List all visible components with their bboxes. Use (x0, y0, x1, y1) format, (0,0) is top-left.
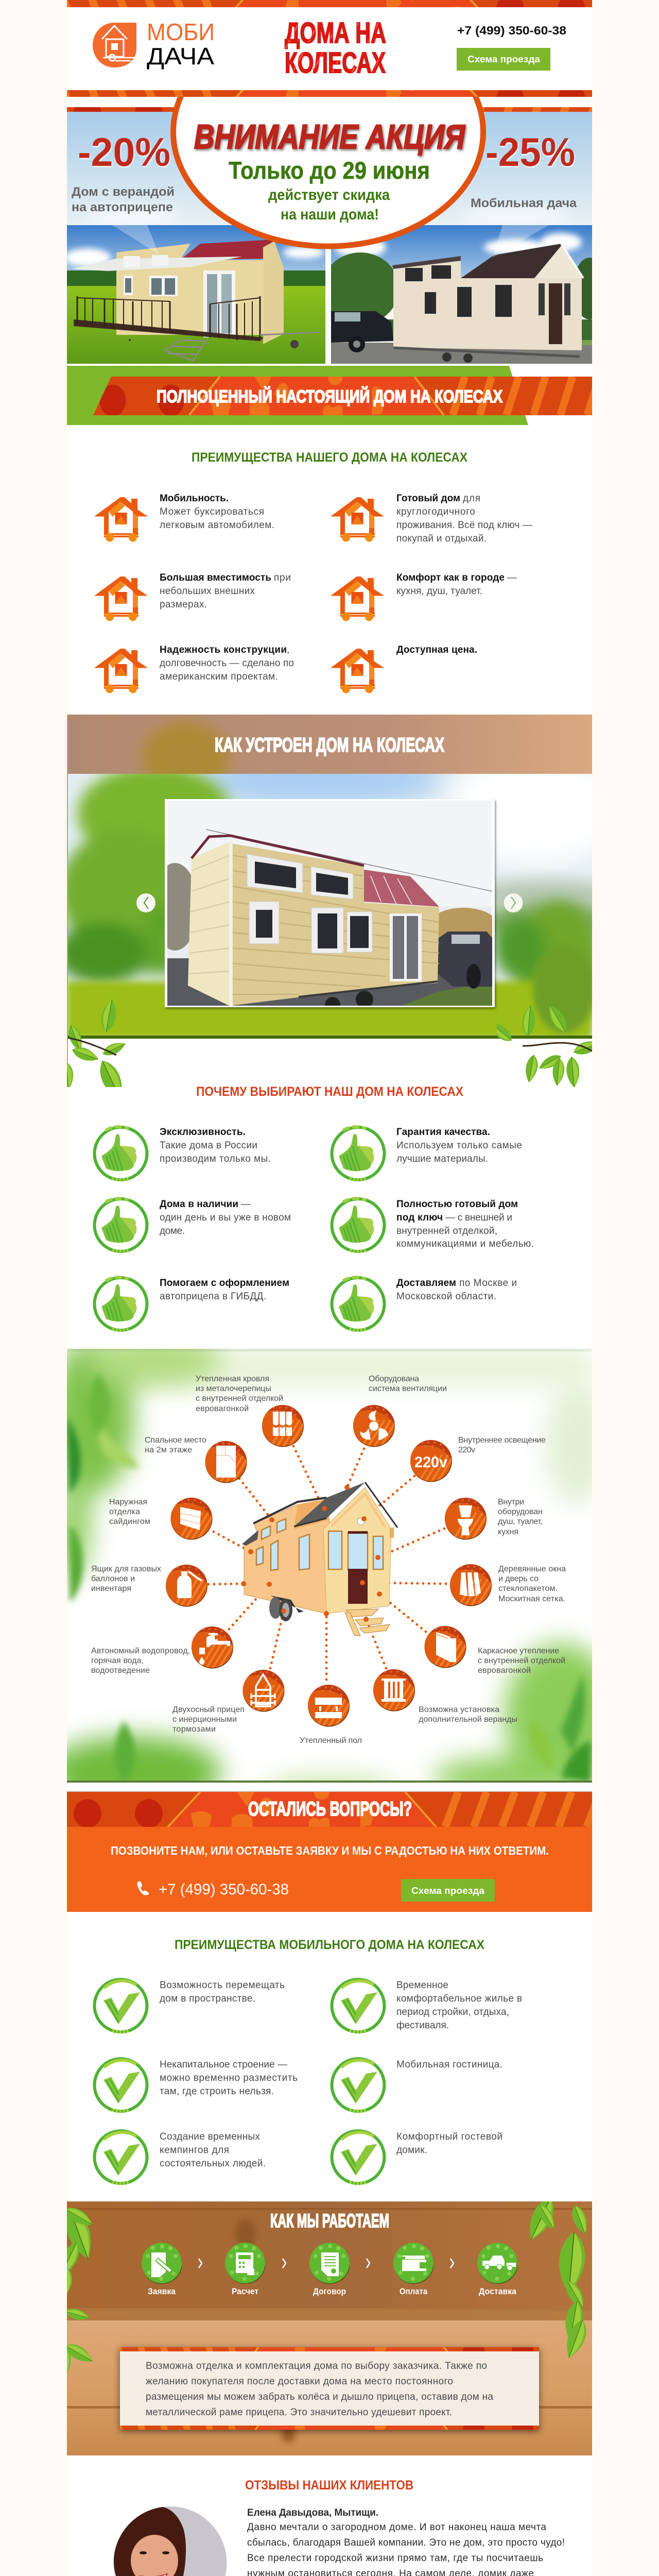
item: guest house (332, 2131, 502, 2183)
heading: ПОЧЕМУ ВЫБИРАЮТ НАШ ДОМ НА КОЛЕСАХ (196, 1084, 463, 1099)
item: ready house: круглогодичного (396, 506, 475, 517)
tiny house illustration (242, 1482, 397, 1636)
note box: Возможна отделка и комплектация дома по выбору заказчика. Также по (146, 2361, 487, 2371)
item: guarantee: Гарантия качества. (396, 1127, 490, 1138)
patterned strip (67, 107, 592, 112)
feature: plumbing: горячая вода, (91, 1656, 144, 1665)
photo: mobile dacha (322, 225, 606, 364)
feature: plumbing: Автономный водопровод, (91, 1647, 190, 1655)
feature: bathroom (442, 1497, 543, 1546)
wood planks (67, 2201, 592, 2320)
feature: insulation: Каркасное утепление (478, 1647, 559, 1655)
arrow (283, 2259, 286, 2268)
item: relocate: дом в пространстве. (160, 1993, 255, 2004)
item: relocate (95, 1979, 285, 2032)
panel: mobile home advantages (95, 1938, 522, 2183)
feature: siding: Наружная (109, 1498, 147, 1506)
item: ready house: для (463, 493, 480, 504)
route button (401, 1879, 495, 1902)
logo: МОБИ (147, 19, 215, 45)
item: camping: Создание временных (160, 2131, 261, 2142)
feature: insulation: евровагонкой (478, 1666, 531, 1675)
arrow (199, 2259, 202, 2268)
feature: windows (447, 1564, 566, 1613)
item: exclusivity: производим только мы. (160, 1154, 271, 1164)
heading: ОТЗЫВЫ НАШИХ КЛИЕНТОВ (245, 2478, 413, 2493)
feature: gas box: Ящик для газовых (91, 1565, 161, 1573)
item: camping (95, 2131, 266, 2183)
title ribbon (67, 366, 599, 425)
hero promo (67, 45, 592, 364)
feature: ventilation: система вентиляции (369, 1384, 447, 1393)
panel: questions call to action (67, 1791, 600, 1912)
note box (114, 2332, 539, 2446)
item: in stock: доме. (160, 1226, 185, 1236)
feature: plumbing (91, 1626, 241, 1675)
item: comfort (331, 572, 517, 621)
feature: bed: Спальное место (145, 1436, 206, 1445)
item: guarantee: Используем только самые (396, 1140, 522, 1151)
item: relocate: Возможность перемещать (160, 1980, 285, 1991)
item: non-capital (95, 2059, 298, 2111)
feature: trailer (172, 1669, 292, 1734)
item: price: Доступная цена. (396, 645, 477, 655)
feature: floor: Утепленный пол (300, 1736, 362, 1745)
item: in stock: Дома в наличии (160, 1199, 238, 1210)
item: guarantee: лучшие материалы. (396, 1154, 488, 1164)
blurred garden background (68, 774, 592, 1039)
panel: advantages of our house (94, 450, 532, 693)
item: comfort: — (507, 572, 517, 583)
step: payment (393, 2243, 433, 2296)
item: reliability (94, 645, 294, 693)
step: contract (309, 2243, 350, 2296)
feature: radiator: Возможна установка (419, 1705, 499, 1714)
item: hotel: Мобильная гостиница. (396, 2059, 502, 2070)
panel: how the house is built (67, 715, 592, 1087)
item: turnkey: — с внешней и (445, 1212, 512, 1223)
note box: желанию покупателя после доставки дома на место постоянного (146, 2376, 453, 2387)
left product name (72, 185, 175, 214)
feature: windows: Москитная сетка. (498, 1595, 565, 1603)
icon: phone (137, 1882, 149, 1895)
item: in stock: один день и вы уже в новом (160, 1212, 291, 1223)
step: calculation (225, 2243, 266, 2296)
panel: house features infographic (67, 1349, 592, 1783)
feature: trailer: с инерционными (172, 1715, 237, 1724)
item: mobility: Может буксироваться (160, 506, 264, 517)
steps (345, 1609, 390, 1636)
item: exclusivity: Такие дома в России (160, 1140, 257, 1151)
item: paperwork (95, 1277, 289, 1330)
phone: +7 (499) 350-60-38 (457, 24, 566, 37)
feature: radiator: дополнительной веранды (419, 1715, 517, 1724)
heading: ОСТАЛИСЬ ВОПРОСЫ? (248, 1798, 412, 1820)
feature: gas box: инвентаря (91, 1584, 131, 1593)
item: capacity: при (274, 572, 291, 583)
item: temporary housing: период стройки, отдыха, (396, 2007, 509, 2018)
feature: insulation: с внутренней отделкой (478, 1656, 565, 1665)
promo oval (173, 18, 483, 246)
feature: trailer: тормозами (172, 1725, 216, 1734)
feature: roof: евровагонкой (196, 1404, 249, 1413)
note box: металлической раме прицепа. Это значительно удешевит проект. (146, 2407, 452, 2418)
slider arrow right (504, 893, 523, 912)
item: turnkey: коммуникациями и мебелью. (396, 1239, 534, 1249)
feature: lighting: 220v (458, 1446, 475, 1454)
note box: размещения мы можем забрать колёса и дышло прицепа, оставив дом на (146, 2392, 493, 2402)
item: ready house: проживания. Всё под ключ — (396, 520, 532, 531)
item: exclusivity (95, 1127, 271, 1180)
item: non-capital: Некапитальное строение — (160, 2059, 287, 2070)
item: temporary housing: фестиваля. (396, 2020, 449, 2031)
feature: siding (109, 1497, 220, 1546)
item: capacity (94, 572, 291, 621)
item: in stock (95, 1198, 291, 1251)
feature: plumbing: водоотведение (91, 1666, 150, 1675)
connector dots (209, 1446, 446, 1680)
item: reliability: Надежность конструкции (160, 645, 287, 655)
item: reliability: американским проектам. (160, 671, 278, 682)
ribbon text: ПОЛНОЦЕННЫЙ НАСТОЯЩИЙ ДОМ НА КОЛЕСАХ (157, 386, 502, 406)
header bottom strip (67, 90, 592, 97)
review: Elena: сбылась, благодаря Вашей компании. Это не дом, это просто чудо! (247, 2537, 565, 2548)
feature: insulation (421, 1625, 565, 1675)
step: payment: Оплата (400, 2286, 427, 2296)
arrow (450, 2259, 454, 2268)
light beams (112, 225, 549, 258)
accent line (67, 715, 68, 1084)
heading: ПРЕИМУЩЕСТВА МОБИЛЬНОГО ДОМА НА КОЛЕСАХ (175, 1938, 484, 1952)
promo sub line 1: действует скидка (268, 187, 390, 204)
item: capacity: небольших внешних (160, 586, 255, 597)
item: capacity: Большая вместимость (160, 572, 271, 583)
feature: roof: из металочерепицы (196, 1384, 271, 1393)
feature: windows: и дверь со (498, 1574, 539, 1583)
item: temporary housing (332, 1979, 522, 2032)
item: temporary housing: комфортабельное жилье в (396, 1993, 522, 2004)
item: delivery: по Москве и (459, 1278, 517, 1289)
item: price (331, 645, 477, 693)
item: temporary housing: Временное (396, 1980, 448, 1991)
feature: lighting (407, 1436, 546, 1488)
feature: lighting: Внутреннее освещение (458, 1436, 546, 1445)
discount left: -20% (78, 129, 170, 175)
item: delivery: Доставляем (396, 1278, 456, 1289)
item: turnkey: под ключ (396, 1212, 443, 1223)
heading: ПРЕИМУЩЕСТВА НАШЕГО ДОМА НА КОЛЕСАХ (192, 450, 467, 465)
feature: radiator (370, 1669, 517, 1724)
blurred leaf background (67, 1349, 592, 1783)
item: exclusivity: Эксклюзивность. (160, 1127, 246, 1138)
leaves right (497, 1005, 592, 1087)
page background (67, 0, 592, 2576)
route button: Схема проезда (411, 1886, 485, 1896)
header (67, 7, 592, 90)
review: Elena: Давно мечтали о загородном доме. И вот наконец наша мечта (247, 2522, 546, 2533)
feature: gas box (91, 1564, 216, 1613)
item: in stock: — (241, 1199, 251, 1210)
call text: ПОЗВОНИТЕ НАМ, ИЛИ ОСТАВЬТЕ ЗАЯВКУ И МЫ С РАДОСТЬЮ НА НИХ ОТВЕТИМ. (111, 1844, 549, 1857)
feature: lighting: 220v (414, 1454, 447, 1471)
item: non-capital: можно временно разместить (160, 2073, 298, 2083)
item: comfort: Комфорт как в городе (396, 572, 505, 583)
review: Elena (247, 2507, 565, 2576)
feature: windows: Деревянные окна (498, 1565, 566, 1573)
slider photo (152, 799, 499, 1012)
item: paperwork: автоприцепа в ГИБДД. (160, 1291, 266, 1302)
item: turnkey (332, 1198, 534, 1251)
feature: siding: отделка (109, 1507, 140, 1516)
step: request (142, 2243, 182, 2296)
corner leaves (54, 2194, 591, 2378)
review: Elena: Все прелести городской жизни прямо там, где ты посчитаешь (247, 2553, 543, 2564)
item: capacity: размерах. (160, 599, 207, 610)
site title: ДОМА НА (285, 16, 386, 49)
feature: gas box: баллонов и (91, 1574, 135, 1583)
item: non-capital: там, где строить нельзя. (160, 2086, 274, 2097)
item: turnkey: внутренней отделкой, (396, 1226, 497, 1236)
panel: why choose us (95, 1084, 534, 1330)
item: delivery: Московской области. (396, 1291, 496, 1302)
site title (285, 16, 386, 79)
top strip (67, 0, 592, 7)
left product name: Дом с верандой (72, 185, 175, 199)
photo: house with veranda (64, 225, 325, 364)
item: mobility: легковым автомобилем. (160, 520, 274, 531)
item: paperwork: Помогаем с оформлением (160, 1278, 289, 1289)
step: request: Заявка (148, 2286, 176, 2296)
promo sub line 2: на наши дома! (281, 206, 379, 223)
feature: bathroom: оборудован (498, 1507, 543, 1516)
trailer wheels (269, 1596, 304, 1621)
route button: Схема проезда (467, 54, 541, 64)
item: reliability: , (287, 645, 289, 655)
review: Elena: Елена Давыдова, Мытищи. (247, 2507, 378, 2518)
feature: windows: стеклопакетом. (498, 1584, 558, 1593)
item: delivery (332, 1277, 517, 1330)
tan title band (68, 715, 592, 774)
item: camping: кемпингов для (160, 2145, 229, 2156)
promo title: ВНИМАНИЕ АКЦИЯ (194, 117, 466, 156)
feature: bed: на 2м этаже (145, 1446, 192, 1454)
arrow (367, 2259, 370, 2268)
item: ready house: покупай и отдыхай. (396, 533, 487, 544)
step: calculation: Расчет (232, 2286, 258, 2296)
item: camping: состоятельных людей. (160, 2158, 266, 2169)
feature: ventilation: Оборудована (369, 1375, 419, 1383)
route button (457, 48, 550, 71)
feature: roof (196, 1375, 312, 1453)
feature: trailer: Двухосный прицеп (172, 1705, 245, 1714)
feature: bed (145, 1436, 255, 1489)
connector end points (241, 1485, 382, 1622)
left product name: на автоприцепе (72, 200, 173, 214)
item: guest house: домик. (396, 2145, 427, 2156)
logo (93, 19, 215, 70)
logo: ДАЧА (147, 43, 214, 70)
leaves left (67, 999, 126, 1087)
item: ready house (331, 493, 532, 544)
heading: КАК УСТРОЕН ДОМ НА КОЛЕСАХ (215, 734, 444, 756)
step: contract: Договор (313, 2286, 346, 2296)
item: guest house: Комфортный гостевой (396, 2131, 502, 2142)
item: mobility (94, 493, 274, 542)
right product name: Мобильная дача (471, 196, 577, 210)
photo: Elena (113, 2506, 228, 2576)
feature: roof: Утепленная кровля (196, 1375, 269, 1383)
feature: siding: сайдингом (109, 1517, 150, 1526)
feature: bathroom: кухня (498, 1528, 518, 1536)
phone number: +7 (499) 350-60-38 (159, 1881, 289, 1898)
item: comfort: кухня, душ, туалет. (396, 586, 482, 597)
promo date: Только до 29 июня (229, 157, 430, 184)
slider arrow left (136, 893, 155, 912)
item: turnkey: Полностью готовый дом (396, 1199, 518, 1210)
item: hotel (332, 2059, 502, 2111)
discount right: -25% (485, 129, 575, 175)
feature: roof: с внутренней отделкой (196, 1394, 283, 1403)
feature: bathroom: душ, туалет, (498, 1517, 543, 1526)
item: reliability: долговечность — сделано по (160, 658, 294, 669)
item: guarantee (332, 1127, 522, 1180)
item: ready house: Готовый дом (396, 493, 460, 504)
step: delivery: Доставка (479, 2286, 516, 2296)
feature: ventilation (350, 1375, 447, 1453)
feature: floor (300, 1684, 362, 1745)
step: delivery (477, 2243, 518, 2296)
panel: testimonials (93, 2478, 565, 2576)
feature: bathroom: Внутри (498, 1498, 524, 1506)
panel: how we work (54, 2194, 592, 2455)
ribbon (67, 1792, 592, 1827)
item: mobility: Мобильность. (160, 493, 229, 504)
hero sky (67, 112, 592, 225)
heading: КАК МЫ РАБОТАЕМ (270, 2210, 389, 2231)
site title: КОЛЕСАХ (285, 46, 386, 79)
